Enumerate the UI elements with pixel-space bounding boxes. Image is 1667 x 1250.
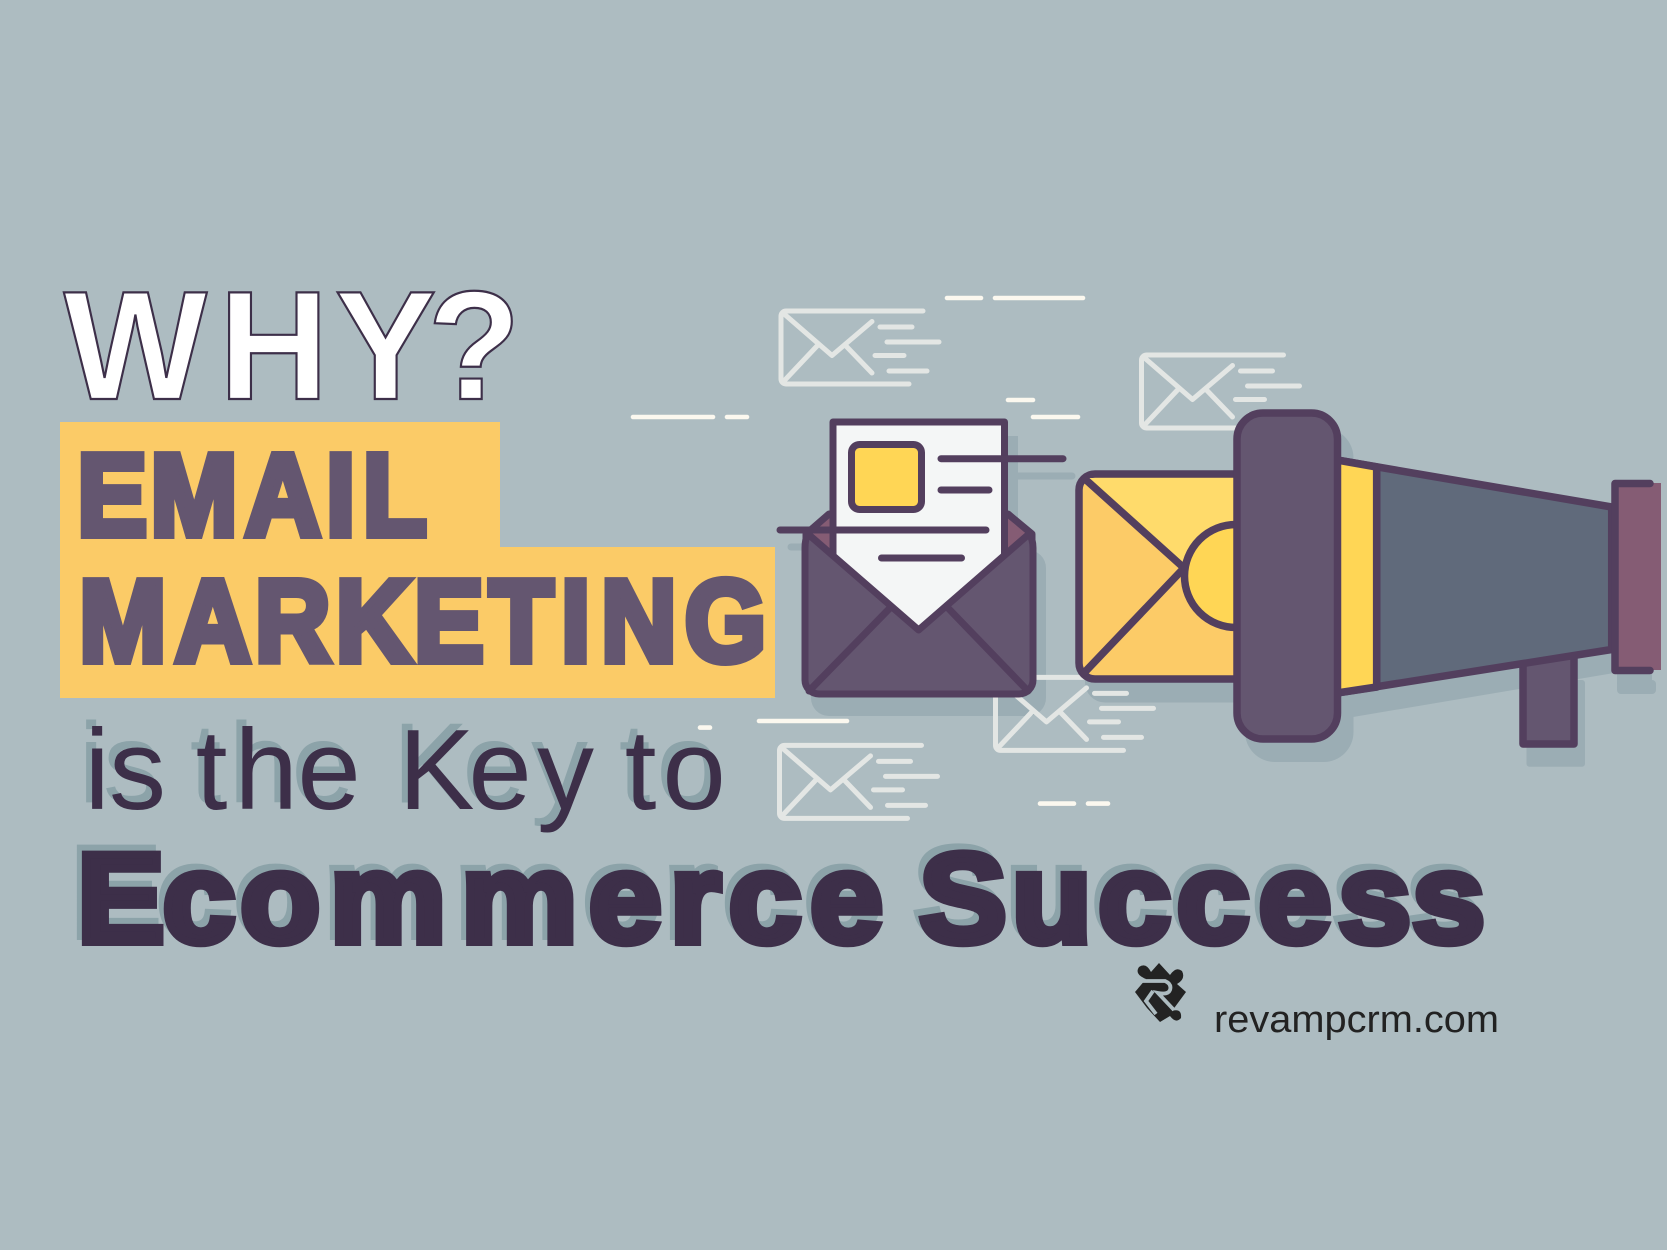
yellow envelope: [1079, 474, 1269, 679]
drop shadows of the illustration: [791, 428, 1656, 767]
letter text lines: [780, 459, 1063, 558]
megaphone grip band: [1237, 413, 1338, 739]
heading: EMAIL MARKETING: [77, 431, 766, 686]
subheading: is the Key to: is the Key to: [84, 707, 726, 834]
envelope fold lines: [809, 608, 1028, 691]
logo: RevampCRM mark: [1135, 963, 1186, 1022]
megaphone handle: [1523, 640, 1574, 744]
highlight block behind Email Marketing: [60, 422, 775, 698]
megaphone maroon back ring fill: [1618, 483, 1661, 670]
heading: EMAIL MARKETING: MARKETING: [79, 557, 766, 686]
megaphone back ring outline: [1615, 484, 1650, 670]
website URL: revampcrm.com: [1214, 999, 1499, 1041]
heading: EMAIL MARKETING: EMAIL: [77, 431, 427, 560]
subheading: is the Key to: is the Key to: [78, 700, 720, 828]
icons: small flying envelopes: [780, 311, 1300, 818]
envelope body: [805, 534, 1033, 694]
icon: megaphone sending a yellow envelope: [1079, 413, 1661, 744]
letter photo box: [852, 444, 922, 510]
title line: WHY?: WHY?: [64, 259, 521, 432]
megaphone cone: [1337, 460, 1612, 693]
icon: open envelope with letter: [780, 422, 1063, 694]
heading: Ecommerce Success: Ecommerce Success: [77, 828, 1485, 970]
white speed dashes: [633, 298, 1108, 804]
heading: Ecommerce Success: Ecommerce Success: [72, 822, 1480, 964]
letter sheet: [833, 422, 1004, 645]
envelope back flap: [806, 514, 1032, 570]
